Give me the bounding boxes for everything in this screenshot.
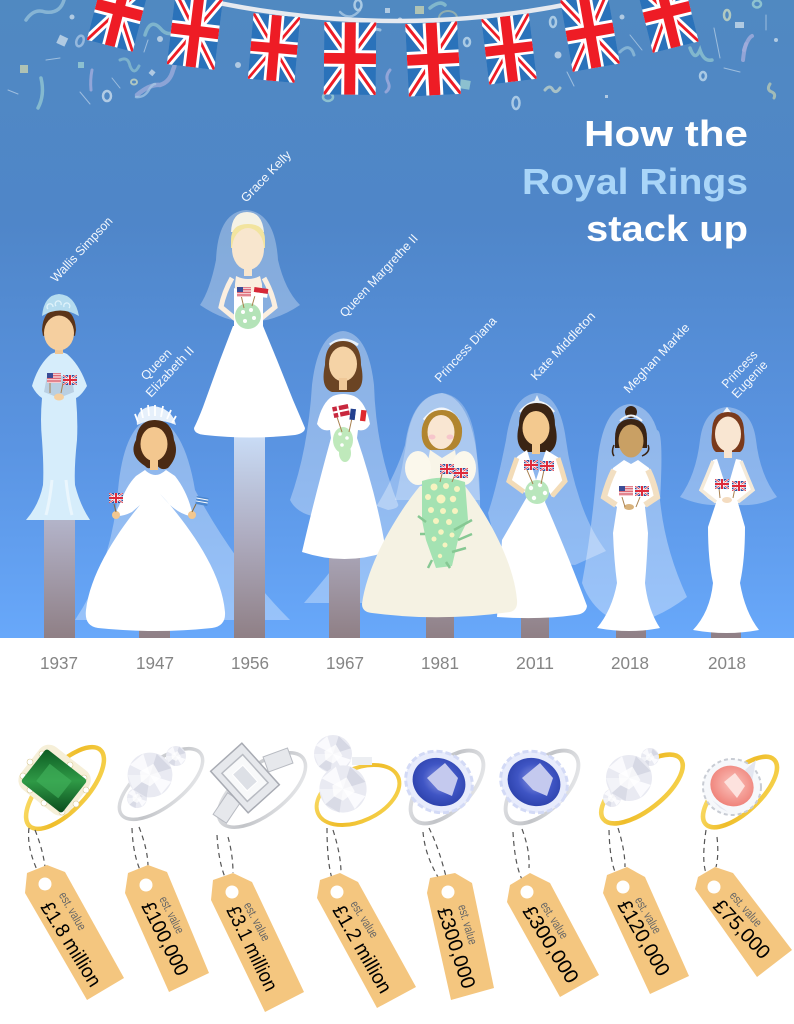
ring 5: sapphire xyxy=(396,738,496,836)
price tag 3: est. value xyxy=(241,900,273,944)
price tag 6: £300,000 xyxy=(518,902,583,987)
bride names: Elizabeth II xyxy=(143,344,197,400)
veil tails behind pillars xyxy=(75,393,480,620)
dashed threads xyxy=(29,827,718,887)
year labels xyxy=(40,653,746,673)
price tag 8 xyxy=(695,867,792,977)
year labels: 2018 xyxy=(611,653,649,673)
year labels: 1967 xyxy=(326,653,364,673)
bride names: Queen Margrethe II xyxy=(337,232,421,320)
title: stack up xyxy=(586,208,748,249)
bride names: Princess Diana xyxy=(432,314,500,385)
bride names: Meghan Markle xyxy=(621,321,693,396)
bride: Grace Kelly xyxy=(194,210,305,438)
title: How the xyxy=(584,113,748,154)
price tag 5: est. value xyxy=(455,903,480,946)
price tag 6 xyxy=(507,873,599,997)
price tag 1: est. value xyxy=(56,890,89,933)
sky background xyxy=(0,0,794,638)
bunting string xyxy=(200,0,592,21)
ring 1: emerald xyxy=(13,735,117,841)
year labels: 1947 xyxy=(136,653,174,673)
bride names: Eugenie xyxy=(729,358,771,401)
title xyxy=(522,113,748,249)
title: Royal Rings xyxy=(522,161,748,202)
confetti xyxy=(8,0,775,109)
bride: Queen Elizabeth II xyxy=(86,405,225,631)
bride: Wallis Simpson xyxy=(26,294,90,520)
bride: Princess Diana xyxy=(362,393,517,617)
price tag 2: £100,000 xyxy=(137,898,192,980)
price tag 6: est. value xyxy=(537,899,571,941)
pillars xyxy=(44,432,741,638)
price tag 7: est. value xyxy=(632,894,664,936)
ring 4: twin diamond gold xyxy=(307,735,409,837)
price tag 2 xyxy=(125,865,209,992)
year labels: 1981 xyxy=(421,653,459,673)
bride: Kate Middleton xyxy=(488,393,606,618)
ring 3: emerald-cut diamond xyxy=(206,739,318,841)
ring 2: diamond white gold xyxy=(108,736,214,832)
price tag 2: est. value xyxy=(156,894,187,936)
price tag 7 xyxy=(603,867,689,994)
price tag 7: £120,000 xyxy=(613,896,674,980)
ring 8: coral halo xyxy=(692,745,788,839)
price tag 4: est. value xyxy=(347,898,381,940)
confetti pieces xyxy=(20,6,778,98)
year labels: 2018 xyxy=(708,653,746,673)
price tag 1: £1.8 million xyxy=(36,898,105,991)
bunting flags xyxy=(87,0,699,97)
bride: Meghan Markle xyxy=(582,404,687,631)
price tag 5 xyxy=(427,873,494,1000)
price tag 8: est. value xyxy=(727,889,765,930)
bride: Queen Margrethe II xyxy=(290,331,398,559)
price tag 3: £3.1 million xyxy=(222,903,282,995)
bride names: Queen xyxy=(138,346,175,383)
year labels: 1956 xyxy=(231,653,269,673)
year labels: 1937 xyxy=(40,653,78,673)
price tag 5: £300,000 xyxy=(432,905,479,991)
year labels: 2011 xyxy=(516,653,554,673)
bride names: Princess xyxy=(719,348,761,391)
bride names: Grace Kelly xyxy=(238,147,295,205)
price tag 3 xyxy=(211,873,304,1012)
white lower background xyxy=(0,638,794,1024)
bride names xyxy=(48,147,771,401)
ring 6: sapphire xyxy=(491,738,591,836)
price tag 4 xyxy=(317,873,416,1008)
bride names: Kate Middleton xyxy=(528,309,598,383)
price tag 1 xyxy=(25,865,124,1000)
ring 7: diamond gold xyxy=(590,742,694,836)
price tag 4: £1.2 million xyxy=(328,902,396,997)
bride: Princess Eugenie xyxy=(680,407,777,633)
bride names: Wallis Simpson xyxy=(48,214,116,285)
price tag 8: £75,000 xyxy=(708,895,774,964)
